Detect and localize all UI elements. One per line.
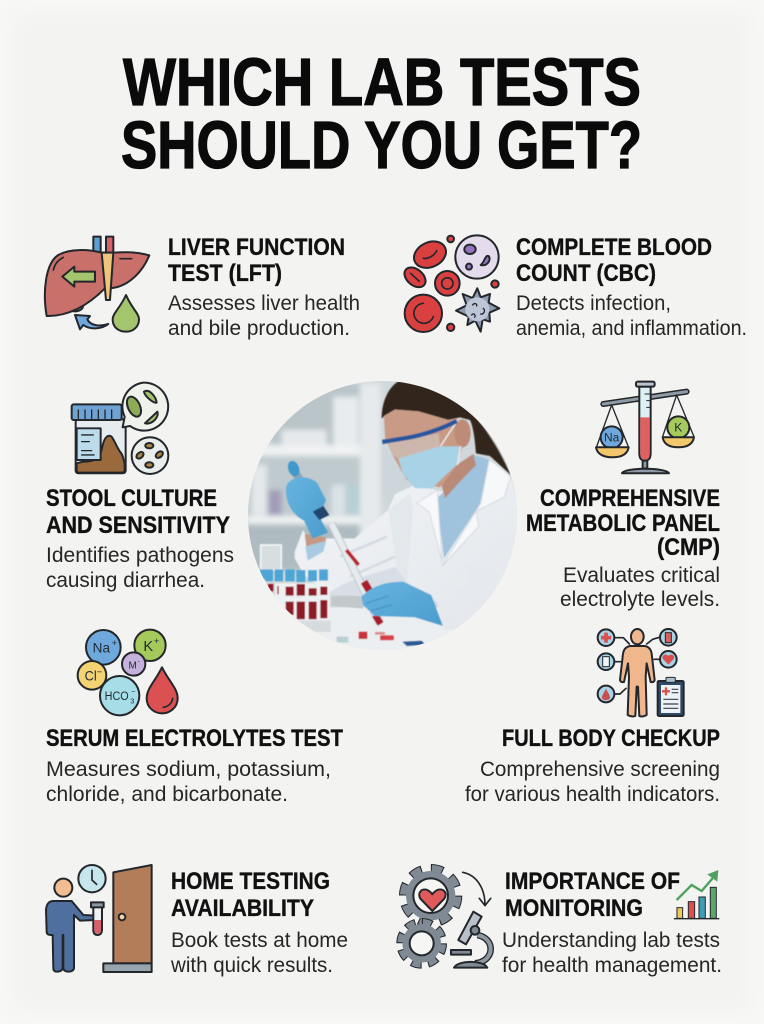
heading: HOME TESTING [171, 868, 330, 895]
panel: stool culture and sensitivity [46, 383, 234, 592]
lab coat [294, 478, 517, 608]
icon: home visit [46, 865, 152, 972]
description: and bile production. [168, 316, 350, 340]
icon: blood cells [401, 235, 499, 332]
description: anemia, and inflammation. [516, 316, 747, 340]
description [170, 928, 348, 977]
photo background [248, 381, 517, 650]
description [560, 563, 720, 611]
glass beaker [261, 545, 281, 570]
icon: electrolytes: + [112, 638, 117, 648]
icon: electrolytes: Na [93, 640, 110, 656]
coat lapels [442, 459, 511, 567]
description: with quick results. [170, 953, 333, 977]
description: Comprehensive screening [480, 757, 720, 781]
heading: (CMP) [657, 534, 720, 561]
icon: electrolytes: Cl [85, 668, 97, 684]
face [384, 410, 463, 487]
description: electrolyte levels. [560, 587, 720, 611]
safety goggles [383, 433, 440, 459]
heading [168, 234, 345, 287]
heading: COMPREHENSIVE [540, 485, 720, 512]
description [168, 291, 360, 340]
icon: human body with indicators [598, 629, 684, 716]
panel: importance of monitoring [401, 868, 722, 977]
description: causing diarrhea. [46, 568, 205, 592]
heading: MONITORING [505, 895, 643, 922]
heading [526, 485, 720, 561]
test tube rack [260, 569, 331, 632]
heading [516, 234, 712, 287]
icon: electrolytes: − [97, 667, 102, 677]
heading: FULL BODY CHECKUP [502, 725, 720, 752]
panel: comprehensive metabolic panel [526, 382, 720, 611]
icon: electrolytes: K [143, 639, 153, 655]
heading [46, 485, 230, 539]
title [121, 45, 642, 183]
heading: COMPLETE BLOOD [516, 234, 712, 261]
description [516, 291, 747, 340]
panel: complete blood count [401, 234, 747, 340]
description: for health management. [502, 953, 722, 977]
items on table [359, 632, 367, 639]
heading: COUNT (CBC) [516, 260, 656, 287]
icon: electrolytes: 3 [130, 696, 134, 705]
heading: AND SENSITIVITY [46, 512, 230, 539]
description: Assesses liver health [168, 291, 360, 315]
description: Measures sodium, potassium, [46, 757, 331, 781]
shirt [437, 455, 489, 558]
heading [505, 868, 680, 922]
heading: AVAILABILITY [171, 895, 314, 922]
heading: SERUM ELECTROLYTES TEST [46, 725, 343, 752]
icon: balance scale with test tube: Na [604, 431, 620, 445]
icon: electrolytes: − [131, 687, 135, 696]
icon: electrolytes: - [138, 658, 140, 665]
heading: TEST (LFT) [168, 260, 282, 287]
icon: balance scale with test tube: K [674, 421, 682, 435]
icon: stool sample jar [72, 383, 168, 474]
description: Evaluates critical [563, 563, 720, 587]
heading: IMPORTANCE OF [505, 868, 680, 895]
upper gloved hand [286, 477, 328, 539]
description [46, 543, 234, 592]
description [502, 928, 722, 977]
neck [442, 454, 476, 498]
description: Understanding lab tests [502, 928, 720, 952]
panel: liver function test [45, 234, 360, 340]
panel: full body checkup [465, 629, 720, 806]
sleeve shading [328, 567, 437, 602]
panel: home testing availability [46, 865, 348, 977]
description [46, 757, 331, 806]
title: SHOULD YOU GET? [121, 108, 642, 183]
wrist and cuff [305, 534, 326, 547]
panel: serum electrolytes test [46, 630, 343, 806]
description: Identifies pathogens [46, 543, 234, 567]
surgical mask [398, 446, 460, 489]
heading [171, 868, 330, 922]
table [240, 607, 530, 660]
icon: balance scale with test tube [596, 382, 694, 473]
pipette [331, 523, 380, 623]
icon: electrolytes: + [154, 636, 159, 646]
icon: electrolytes [78, 630, 178, 715]
description [465, 757, 720, 806]
ear [455, 419, 471, 447]
description: for various health indicators. [465, 782, 720, 806]
heading: LIVER FUNCTION [168, 234, 345, 261]
heading: STOOL CULTURE [46, 485, 217, 512]
icon: rising bar chart [674, 870, 719, 919]
title: WHICH LAB TESTS [123, 45, 641, 120]
heading: METABOLIC PANEL [526, 510, 720, 537]
icon: electrolytes: M [128, 660, 137, 671]
photo: lab technician with pipette [248, 381, 517, 650]
icon: electrolytes: HCO [105, 689, 129, 703]
description: Detects infection, [516, 291, 671, 315]
icon: liver [45, 237, 149, 332]
lower gloved hand [361, 582, 443, 626]
hair [382, 379, 511, 475]
icon: gears and microscope [401, 869, 491, 968]
description: chloride, and bicarbonate. [46, 782, 288, 806]
description: Book tests at home [171, 928, 348, 952]
